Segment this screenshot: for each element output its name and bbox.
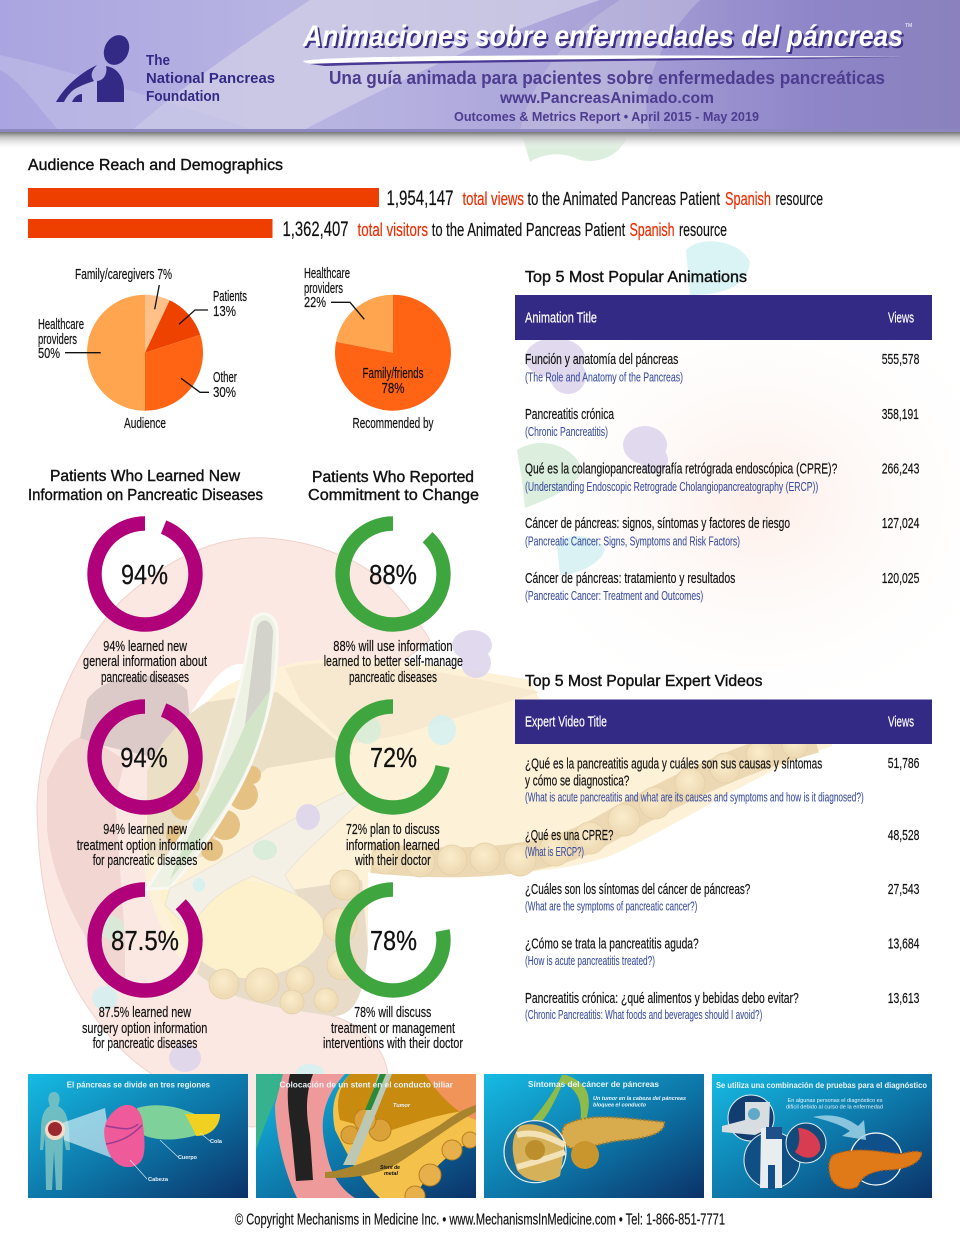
ring: 94% general information: 94% learned new (103, 639, 187, 655)
table: top animations: Función y anatomía del páncreas (525, 351, 678, 368)
heading: commitment to change (308, 469, 479, 504)
ring: 87.5% surgery option: 87.5% (111, 925, 179, 956)
table: top animations: 555,578 (882, 351, 919, 368)
subtitle: Una guía animada para pacientes sobre enfermedades pancreáticas (329, 68, 885, 88)
table: top animations: (Understanding Endoscopic Retrograde Cholangiopancreatography (ERCP)) (525, 479, 818, 494)
bile duct (147, 614, 277, 889)
table: top expert videos: y cómo se diagnostica? (525, 772, 629, 790)
title: TM (905, 23, 912, 29)
lobules (160, 732, 815, 1016)
stat: total views: 1,954,147 (386, 187, 454, 210)
thumbnail: biliary stent placement: metal (384, 1171, 398, 1177)
table: top expert videos: Expert Video Title (525, 714, 607, 730)
ring: 78% discuss treatment: 78% will discuss (354, 1005, 431, 1021)
thumbnail: three pancreas regions: Cuerpo (178, 1155, 198, 1161)
heading: top animations: Top 5 Most Popular Animations (525, 269, 747, 286)
ring: 88% self-manage: learned to better self-manage (324, 654, 463, 670)
table: top expert videos: (What is ERCP?) (525, 844, 584, 859)
ring: 72% discuss information (334, 698, 452, 869)
table: top animations: 127,024 (882, 515, 919, 532)
stat: total visitors: resource (679, 220, 727, 240)
table: top expert videos: ¿Cómo se trata la pancreatitis aguda? (525, 936, 699, 952)
table: top animations: (Pancreatic Cancer: Signs, Symptoms and Risk Factors) (525, 534, 740, 548)
heading: commitment to change: Patients Who Reported (312, 469, 474, 486)
thumbnail: biliary stent placement: Colocación de un stent en el conducto biliar (280, 1080, 453, 1090)
ring: 94% treatment option: treatment option information (77, 838, 213, 854)
pie chart: recommended by: Recommended by (352, 415, 434, 432)
thumbnail: diagnostic tests: En algunas personas el diagnóstico es (788, 1098, 883, 1104)
thumbnail: biliary stent placement (256, 1074, 478, 1206)
ring: 87.5% surgery option: for pancreatic diseases (93, 1036, 197, 1052)
ring: 88% self-manage: pancreatic diseases (349, 670, 437, 686)
pie chart: audience: Patients (213, 288, 247, 305)
table: top expert videos: Pancreatitis crónica: ¿qué alimentos y bebidas debo evitar? (525, 990, 799, 1007)
report dates: Outcomes & Metrics Report • April 2015 - May 2019 (454, 109, 759, 124)
stat: total views (28, 187, 823, 210)
stat: total visitors (28, 218, 727, 241)
ring: 72% discuss information: with their doctor (354, 853, 431, 869)
ring: 94% treatment option: 94% learned new (103, 822, 187, 838)
stat: total views: total views (462, 189, 524, 209)
stat: total views: resource (776, 189, 823, 209)
ring: 78% discuss treatment: treatment or management (331, 1021, 455, 1037)
thumbnail: diagnostic tests: difícil debido al curso de la enfermedad (786, 1104, 883, 1110)
thumbnail: pancreatic cancer symptoms: Un tumor en la cabeza del páncreas (593, 1096, 686, 1102)
table: top animations: 266,243 (882, 460, 919, 478)
thumbnail: pancreatic cancer symptoms (484, 1074, 704, 1198)
table: top animations: Pancreatitis crónica (525, 406, 614, 423)
table: top animations (515, 295, 932, 603)
table: top expert videos: (What are the symptoms of pancreatic cancer?) (525, 898, 697, 914)
stat: total visitors: Spanish (630, 220, 674, 240)
table: top animations: Cáncer de páncreas: tratamiento y resultados (525, 570, 735, 587)
ring: 78% discuss treatment: interventions with their doctor (323, 1036, 463, 1052)
table: top expert videos: ¿Cuáles son los síntomas del cáncer de páncreas? (525, 881, 750, 898)
ring: 78% discuss treatment: 78% (370, 925, 417, 956)
table: top expert videos: (Chronic Pancreatitis: What foods and beverages should I avoid?) (525, 1007, 762, 1022)
table: top expert videos: ¿Qué es la pancreatitis aguda y cuáles son sus causas y síntomas (525, 756, 822, 772)
pie chart: audience: providers (38, 331, 77, 348)
ring: 88% self-manage: 88% will use information (333, 639, 453, 655)
pie chart: recommended by (304, 265, 451, 432)
header banner (0, 0, 960, 132)
table: top animations: 358,191 (882, 406, 919, 423)
ring: 87.5% surgery option (74, 869, 216, 1052)
table: top animations: (Pancreatic Cancer: Treatment and Outcomes) (525, 588, 703, 603)
ring: 88% self-manage: 88% (369, 559, 417, 590)
table: top animations: Views (888, 310, 914, 326)
logo text: Foundation (146, 88, 220, 105)
thumbnail: diagnostic tests (712, 1074, 932, 1198)
pie chart: audience: Family/caregivers 7% (75, 266, 172, 283)
table: top expert videos (515, 700, 932, 1022)
title (302, 20, 912, 66)
pie chart: audience: 13% (213, 303, 236, 320)
pie chart: audience: 50% (38, 345, 60, 362)
stat: total visitors: total visitors (358, 220, 428, 240)
pie chart: audience: 30% (213, 384, 236, 401)
table: top expert videos: 27,543 (888, 881, 919, 898)
ring: 72% discuss information: 72% (370, 742, 417, 773)
table: top animations: (The Role and Anatomy of the Pancreas) (525, 370, 683, 384)
heading: learned new information: Information on Pancreatic Diseases (28, 487, 263, 504)
thumbnail: biliary stent placement: Stent de (380, 1165, 400, 1171)
table: top expert videos: 48,528 (888, 827, 919, 844)
heading: learned new information: Patients Who Learned New (50, 468, 240, 485)
ring: 72% discuss information: 72% plan to discuss (346, 822, 440, 838)
table: top expert videos: (How is acute pancreatitis treated?) (525, 953, 655, 968)
thumbnail: diagnostic tests: Se utiliza una combinación de pruebas para el diagnóstico (716, 1081, 927, 1090)
logo text: National Pancreas (146, 70, 275, 87)
table: top animations: Animation Title (525, 310, 597, 326)
stat: total views: Spanish (725, 189, 771, 209)
stat: total visitors: to the Animated Pancreas Patient (432, 220, 625, 240)
table: top expert videos: 13,613 (888, 990, 919, 1007)
pie chart: recommended by: Healthcare (304, 265, 350, 282)
heading: commitment to change: Commitment to Change (308, 487, 479, 504)
ring: 78% discuss treatment (323, 881, 463, 1052)
background illustration: faded pancreas (37, 132, 960, 1127)
pancreas body (143, 659, 832, 1016)
heading: learned new information (28, 468, 263, 504)
thumbnail: pancreatic cancer symptoms: Síntomas del cáncer de páncreas (528, 1080, 660, 1089)
heading: audience reach: Audience Reach and Demographics (28, 157, 283, 174)
pie chart: audience: Audience (124, 415, 166, 432)
ring: 87.5% surgery option: surgery option information (82, 1021, 207, 1037)
ring: 94% treatment option (77, 691, 213, 869)
ring: 72% discuss information: information learned (346, 838, 440, 854)
ring: 94% general information: general information about (83, 654, 207, 670)
table: top expert videos: ¿Qué es una CPRE? (525, 827, 613, 844)
logo text (146, 52, 275, 105)
pancreatic ducts (165, 789, 362, 930)
table: top expert videos: 51,786 (888, 755, 919, 772)
ring: 88% self-manage (322, 503, 464, 686)
duodenum (37, 538, 430, 1127)
heading: top expert videos: Top 5 Most Popular Expert Videos (525, 673, 762, 690)
ring: 94% general information: pancreatic diseases (101, 670, 189, 686)
website: www.PancreasAnimado.com (499, 90, 714, 107)
table: top expert videos: Views (888, 714, 914, 730)
stat: total visitors: 1,362,407 (282, 218, 348, 241)
ring: 94% general information: 94% (121, 559, 168, 590)
icon: human silhouette (40, 1092, 70, 1190)
thumbnail: three pancreas regions: Cola (210, 1139, 223, 1145)
pie chart: recommended by: 22% (304, 294, 326, 311)
pie chart: recommended by: 78% (382, 380, 404, 397)
pie chart: audience: Healthcare (38, 316, 84, 333)
table: top animations: Cáncer de páncreas: signos, síntomas y factores de riesgo (525, 515, 790, 532)
ring: 87.5% surgery option: 87.5% learned new (99, 1005, 191, 1021)
brown lobule cluster (166, 766, 261, 861)
pie chart: recommended by: Family/friends (362, 365, 424, 382)
pie chart: audience: Other (213, 369, 237, 386)
thumbnail: pancreatic cancer symptoms: bloquea el conducto (593, 1102, 647, 1108)
footer: copyright: © Copyright Mechanisms in Medicine Inc. • www.MechanismsInMedicine.com • Tel: 1-866-851-7771 (235, 1212, 725, 1228)
icon: foundation figure (56, 31, 134, 102)
pie chart: recommended by: providers (304, 280, 343, 297)
pie chart: audience (38, 266, 247, 432)
table: top expert videos: 13,684 (888, 936, 919, 952)
logo: National Pancreas Foundation (56, 31, 275, 105)
thumbnail: three pancreas regions (28, 1074, 248, 1198)
table: top animations: (Chronic Pancreatitis) (525, 424, 608, 439)
ring: 94% general information (79, 508, 211, 686)
stat: total views: to the Animated Pancreas Patient (528, 189, 720, 209)
ring: 94% treatment option: for pancreatic diseases (93, 853, 197, 869)
thumbnail: three pancreas regions: Cabeza (148, 1177, 169, 1183)
logo text: The (146, 52, 170, 69)
thumbnail: three pancreas regions: El páncreas se divide en tres regiones (67, 1080, 211, 1090)
ring: 94% treatment option: 94% (120, 742, 168, 773)
thumbnail: biliary stent placement: Tumor (393, 1103, 411, 1109)
table: top animations: 120,025 (882, 570, 919, 587)
